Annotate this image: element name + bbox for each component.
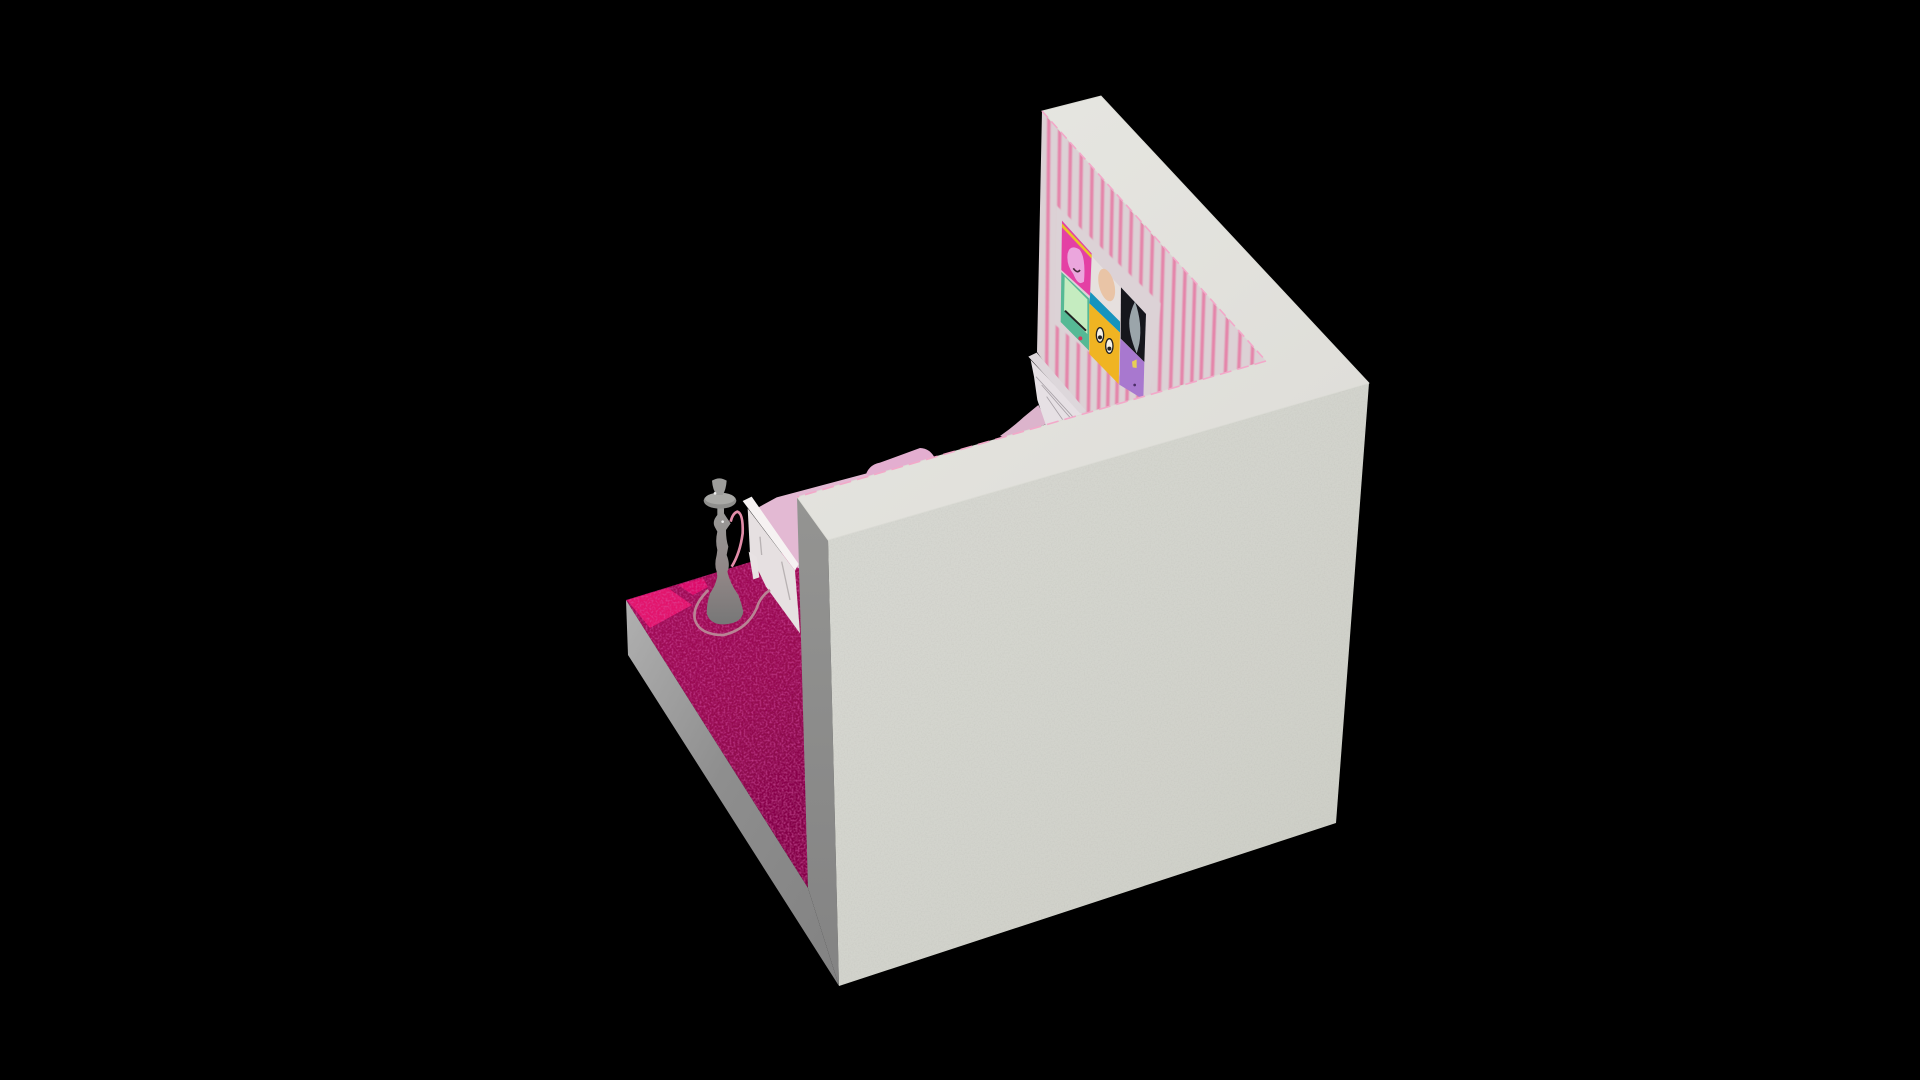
headboard panel <box>1031 360 1086 427</box>
bed headboard in the back corner <box>865 353 1086 478</box>
stem <box>707 508 743 624</box>
panel: purple character <box>1119 339 1144 399</box>
footboard leg <box>749 552 759 579</box>
pink trim along inner wall edges <box>797 111 1266 497</box>
charcoal tray <box>704 493 736 509</box>
bed footboard and blanket <box>743 473 873 633</box>
panel: black with grey flame <box>1121 287 1146 362</box>
poster frame <box>1054 205 1161 400</box>
L-shaped wall top <box>797 96 1369 540</box>
panel: yellow dog <box>1089 303 1120 384</box>
hose to stem <box>731 512 743 567</box>
panel: white with round face <box>1091 257 1120 322</box>
headboard top rail <box>1028 353 1086 413</box>
pink duvet behind headboard <box>1000 405 1048 438</box>
back wall with striped wallpaper <box>1037 110 1266 440</box>
footboard top rail <box>743 497 799 571</box>
pink blanket <box>757 473 873 568</box>
floor slab side <box>626 600 839 986</box>
panel: blue band <box>1089 292 1120 333</box>
wall inner side face <box>797 497 839 986</box>
magenta carpet floor <box>626 548 808 888</box>
front wall large face <box>828 383 1369 986</box>
poster artwork <box>1061 221 1146 399</box>
bowl <box>712 478 727 495</box>
hose on floor <box>694 590 770 635</box>
pillow <box>865 448 935 478</box>
footboard panel <box>748 508 800 633</box>
isometric room scene <box>626 96 1370 986</box>
hookah on the carpet <box>694 478 770 635</box>
sunlight patches on carpet <box>627 588 692 628</box>
panel: green robot <box>1061 272 1089 351</box>
framed poster with six character panels <box>1054 205 1161 400</box>
panel: pink character <box>1061 221 1092 296</box>
